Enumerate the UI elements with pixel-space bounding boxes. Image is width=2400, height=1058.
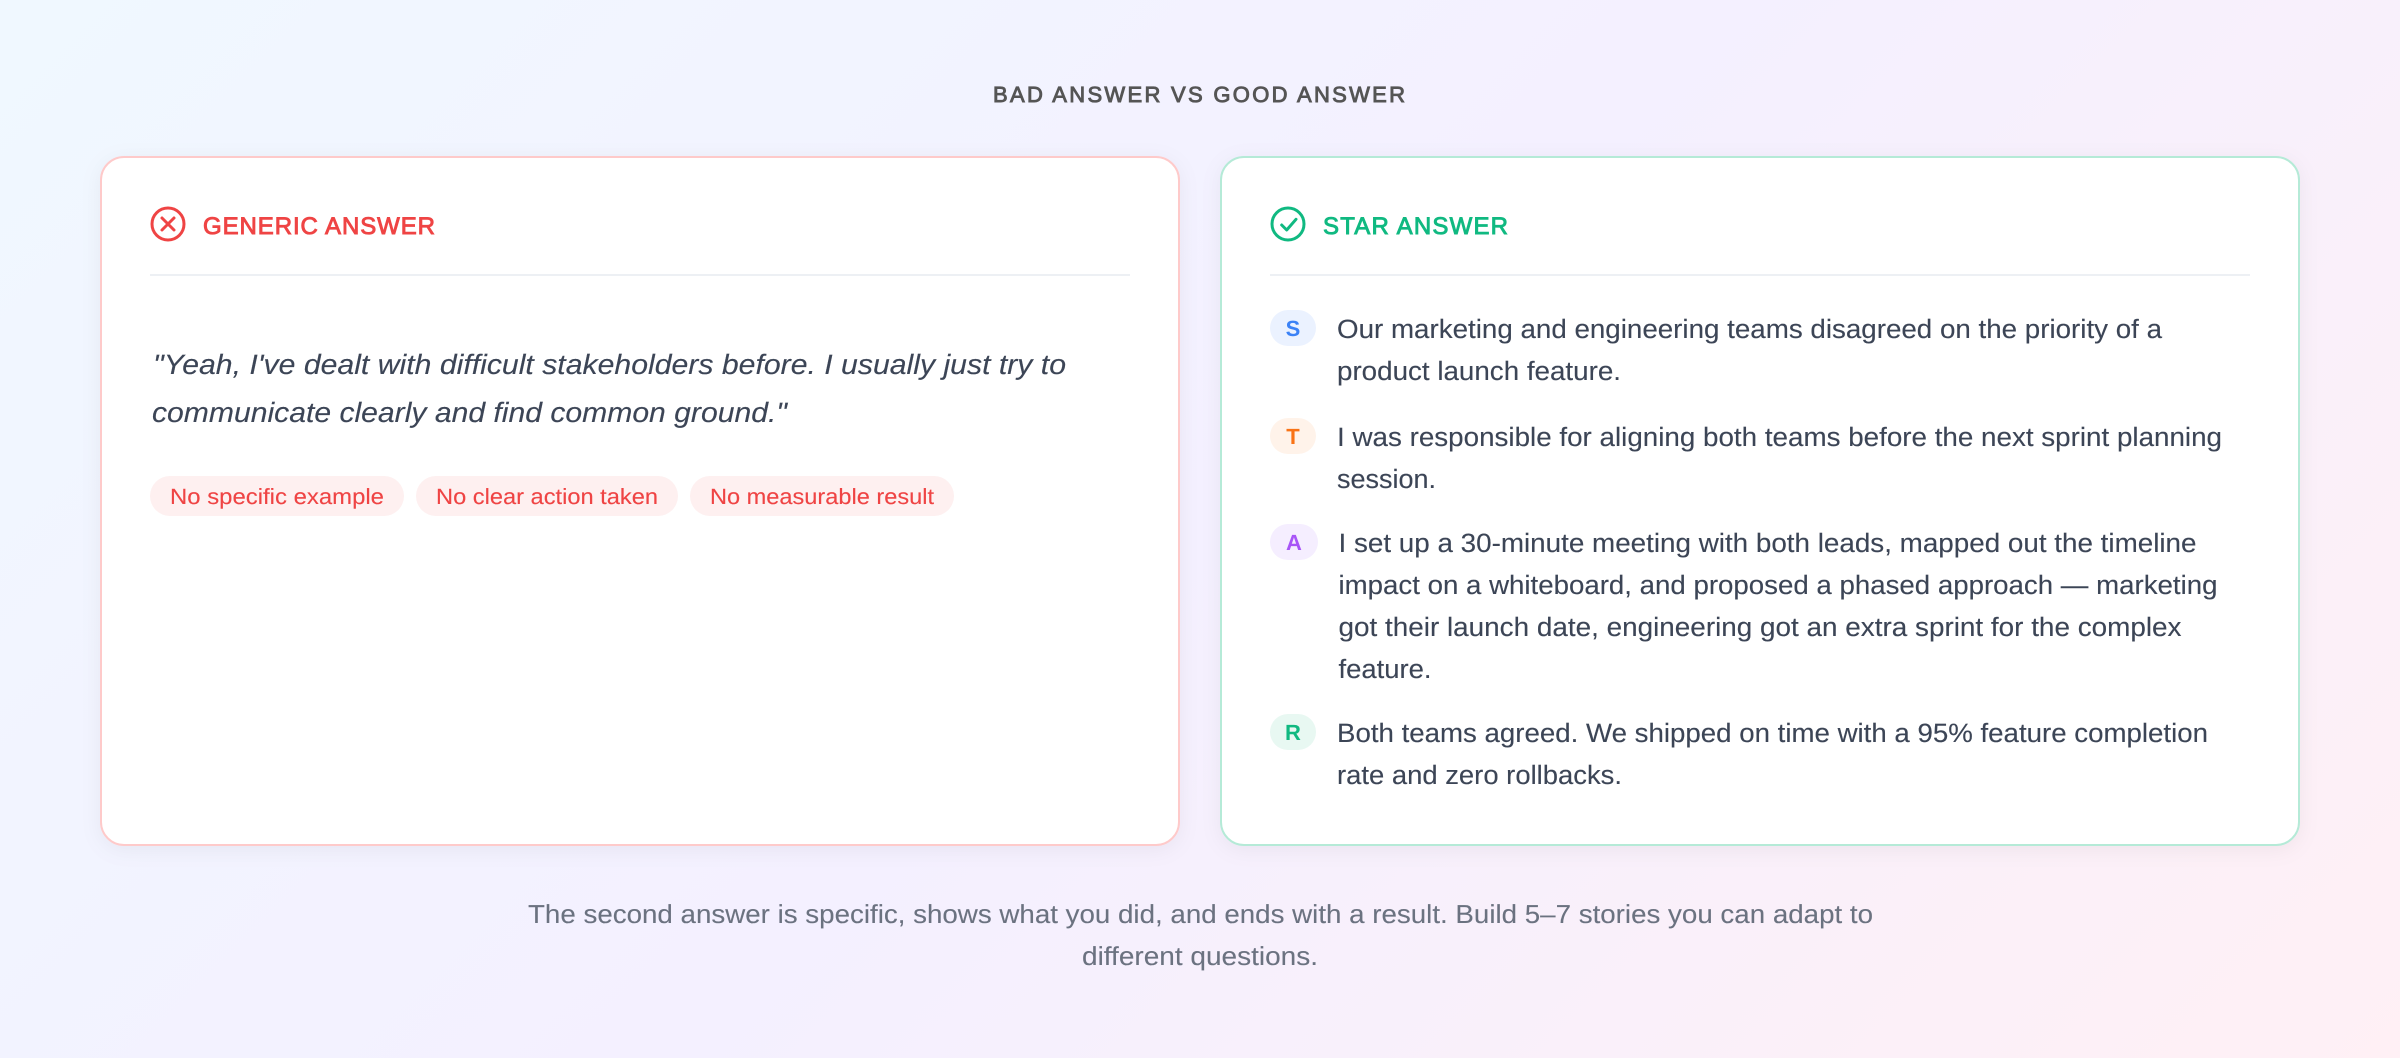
heading: generic answer: GENERIC ANSWER xyxy=(203,213,435,240)
pill: no measurable result xyxy=(690,476,954,516)
icon: red cross in circle xyxy=(152,208,184,240)
badge: S: S xyxy=(1286,316,1300,341)
row: result xyxy=(1270,714,2208,790)
pill: no specific example xyxy=(150,476,404,516)
text: result: Both teams agreed. We shipped on time with a 95% feature completion xyxy=(1337,718,2208,748)
pill: no clear action taken xyxy=(416,476,678,516)
footer note xyxy=(528,899,1873,971)
footer note: different questions. xyxy=(1082,941,1318,971)
badge: A: A xyxy=(1286,530,1302,555)
text: action: I set up a 30-minute meeting with both leads, mapped out the timeline xyxy=(1338,528,2196,558)
badge: T: T xyxy=(1286,424,1300,449)
text: result xyxy=(1337,718,2208,790)
pill: no specific example: No specific example xyxy=(170,484,384,509)
row: task xyxy=(1270,418,2222,494)
badge: T xyxy=(1270,418,1316,454)
badge: R: R xyxy=(1285,720,1301,745)
badge: S xyxy=(1270,310,1316,346)
text: situation: product launch feature. xyxy=(1337,356,1621,386)
text: situation xyxy=(1337,314,2162,386)
panel: generic answer xyxy=(101,157,1179,845)
text: action: got their launch date, engineering got an extra sprint for the complex xyxy=(1338,612,2182,642)
text: task xyxy=(1337,422,2222,494)
pill: no measurable result: No measurable result xyxy=(710,484,934,509)
text: task: I was responsible for aligning both teams before the next sprint planning xyxy=(1337,422,2222,452)
text: task: session. xyxy=(1337,464,1436,494)
panel: star answer xyxy=(1221,157,2299,845)
text: situation: Our marketing and engineering teams disagreed on the priority of a xyxy=(1337,314,2162,344)
pill: no clear action taken: No clear action taken xyxy=(436,484,658,509)
icon: green check in circle xyxy=(1272,208,1304,240)
text: action: impact on a whiteboard, and proposed a phased approach — marketing xyxy=(1338,570,2218,600)
badge: A xyxy=(1270,524,1318,560)
text: action: feature. xyxy=(1338,654,1432,684)
quote: generic answer text: communicate clearly and find common ground." xyxy=(152,397,788,428)
text: action xyxy=(1338,528,2218,684)
quote: generic answer text xyxy=(152,349,1066,428)
badge: R xyxy=(1270,714,1316,750)
row: situation xyxy=(1270,310,2162,386)
title: BAD ANSWER VS GOOD ANSWER xyxy=(993,82,1405,107)
footer note: The second answer is specific, shows what you did, and ends with a result. Build 5–7 stories you can adapt to xyxy=(528,899,1873,929)
row: action xyxy=(1270,524,2218,684)
quote: generic answer text: "Yeah, I've dealt with difficult stakeholders before. I usually just try to xyxy=(153,349,1066,380)
text: result: rate and zero rollbacks. xyxy=(1337,760,1622,790)
heading: star answer: STAR ANSWER xyxy=(1323,213,1508,240)
